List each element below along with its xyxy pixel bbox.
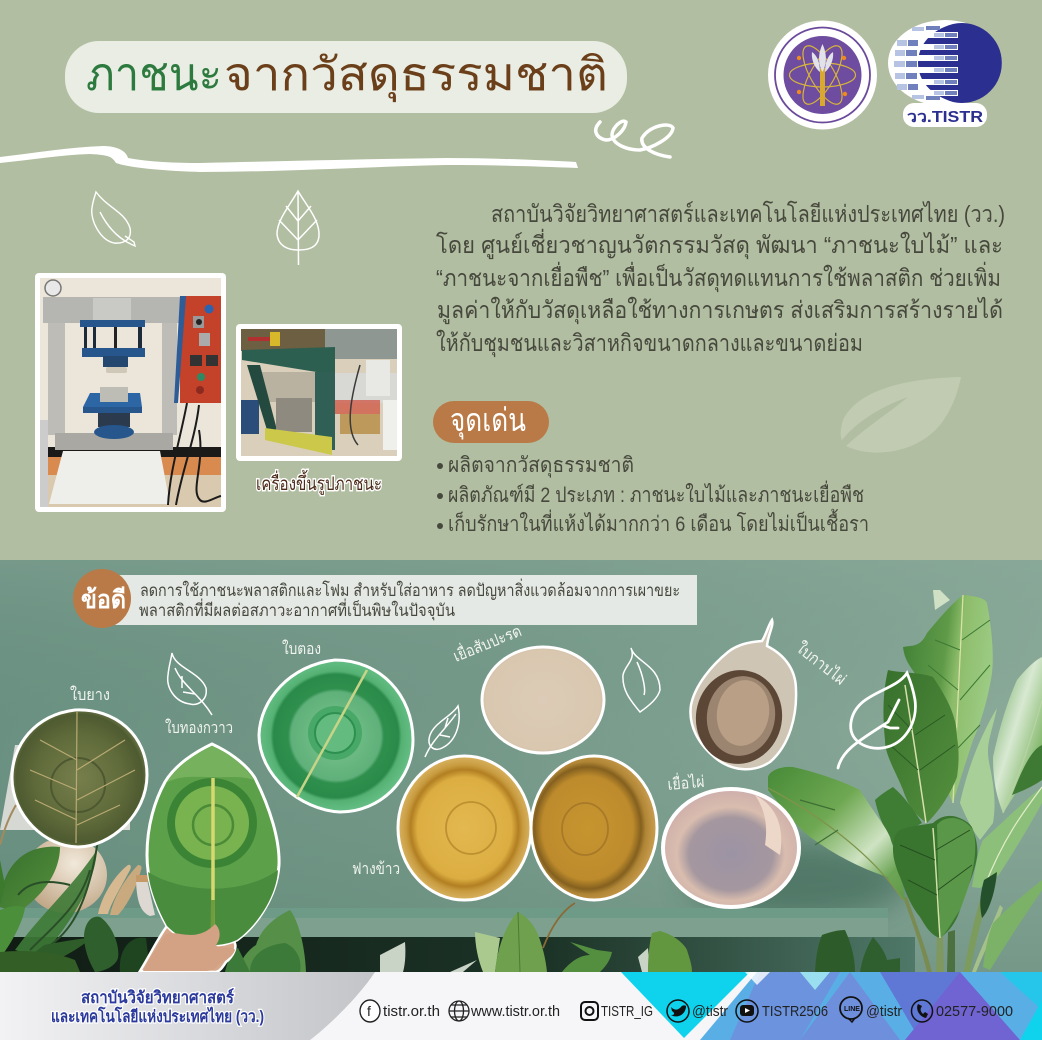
card behind plate — [0, 745, 130, 830]
icon: TISTR logo — [888, 20, 1002, 127]
plate: pineapple pulp — [482, 647, 604, 753]
text block: description: ให้กับชุมชนและวิสาหกิจขนาดกลางและขนาดย่อม — [436, 330, 863, 357]
panel: advantages banner: ลดการใช้ภาชนะพลาสติกและโฟม สำหรับใส่อาหาร ลดปัญหาสิ่งแวดล้อมจากการเผาขยะ — [140, 578, 680, 600]
label: rubber leaf: ใบยาง — [70, 685, 110, 704]
contact: facebook: tistr.or.th — [383, 1003, 440, 1020]
plate: bamboo pulp — [663, 789, 799, 907]
panel: advantages banner: พลาสติกที่มีผลต่อสภาวะอากาศที่เป็นพิษในปัจจุบัน — [139, 598, 455, 621]
squiggle decoration — [596, 121, 673, 157]
leaf: small back — [960, 708, 997, 840]
panel: advantages banner: ข้อดี — [81, 586, 126, 614]
icon: globe — [449, 1001, 469, 1021]
leaf: horizontal — [768, 767, 905, 900]
leaf: tall top — [903, 595, 993, 803]
footer: institute name: และเทคโนโลยีแห่งประเทศไทย (วว.) — [51, 1006, 264, 1026]
plants: lower middle foliage — [225, 903, 900, 972]
label: rice straw: ฟางข้าว — [352, 860, 400, 878]
plant: banana leaves at right — [768, 590, 1042, 972]
leaf: right lower — [972, 787, 1042, 888]
brush stroke under title — [0, 146, 578, 172]
leaf: centre front — [893, 816, 977, 938]
icon: translucent leaf — [841, 377, 961, 453]
icon: outline leaf wall middle — [425, 706, 459, 757]
footer: institute name — [51, 988, 264, 1026]
contact: line: @tistr — [866, 1003, 902, 1020]
plate: rubber leaf — [12, 710, 147, 847]
list: highlights — [437, 454, 869, 536]
icon: outline leaf wall left — [168, 653, 212, 715]
plate: butea leaf with hand — [140, 744, 279, 972]
contact: youtube: TISTR2506 — [762, 1003, 828, 1020]
vase and lids — [0, 805, 155, 916]
icon: line: LINE — [844, 1006, 860, 1013]
icon: large outline leaf — [838, 673, 915, 768]
label: pineapple pulp: เยื่อสับปะรด — [450, 619, 524, 666]
panel: top sage background — [0, 0, 1042, 560]
icon: phone — [912, 1000, 932, 1022]
label: bamboo pulp: เยื่อไผ่ — [667, 770, 705, 794]
list: highlights: ผลิตจากวัสดุธรรมชาติ — [448, 454, 634, 478]
footer: institute name: สถาบันวิจัยวิทยาศาสตร์ — [81, 988, 234, 1007]
icon: TISTR logo: วว.TISTR — [907, 109, 983, 126]
icon: facebook — [360, 1000, 380, 1022]
contact: twitter: @tistr — [692, 1003, 728, 1020]
photo: forming machine small — [236, 324, 402, 461]
text block: description — [436, 201, 1005, 357]
plate: rice straw pair — [398, 756, 657, 900]
label: butea leaf: ใบทองกวาว — [165, 718, 233, 737]
plate: banana leaf — [259, 660, 413, 812]
shelf — [0, 908, 915, 972]
title — [65, 41, 627, 113]
label: bamboo sheath: ใบกาบไผ่ — [793, 638, 850, 689]
list: highlights: เก็บรักษาในที่แห้งได้มากกว่า 6 เดือน โดยไม่เป็นเชื้อรา — [448, 509, 869, 536]
icon: youtube — [736, 1000, 758, 1022]
leaf: bottom right — [983, 880, 1042, 970]
icon: instagram — [581, 1002, 598, 1020]
label: banana leaf: ใบตอง — [282, 639, 321, 658]
icon: outline leaf wall right — [623, 648, 660, 712]
icon: ministry logo — [768, 20, 877, 130]
icon: facebook: f — [367, 1003, 371, 1019]
caption: machine: เครื่องขึ้นรูปภาชนะ — [256, 470, 382, 495]
heading: highlights — [433, 401, 549, 443]
panel: footer — [0, 972, 1042, 1040]
footer: contact row — [360, 997, 1013, 1022]
plants: lower left foliage — [0, 840, 150, 972]
leaf: small left — [875, 787, 922, 845]
title: จากวัสดุธรรมชาติ — [224, 48, 608, 103]
contact: website: www.tistr.or.th — [470, 1003, 560, 1020]
title: ภาชนะ — [86, 48, 222, 100]
panel: advantages banner — [73, 569, 697, 628]
contact: instagram: TISTR_IG — [601, 1003, 653, 1020]
contact: phone: 02577-9000 — [936, 1003, 1013, 1020]
plate: bamboo sheath — [688, 620, 796, 771]
icon: outline leaf with stem — [277, 191, 319, 265]
icon: outline leaf left — [92, 192, 135, 246]
leaf: dark centre — [883, 670, 959, 823]
icon: twitter — [667, 1000, 689, 1022]
panel: lower green wall scene — [0, 560, 1042, 972]
list: highlights: ผลิตภัณฑ์มี 2 ประเภท : ภาชนะใบไม้และภาชนะเยื่อพืช — [448, 480, 864, 507]
icon: line — [840, 997, 862, 1022]
leaf: right pale — [993, 657, 1042, 813]
heading: highlights: จุดเด่น — [450, 402, 526, 440]
text block: description: โดย ศูนย์เชี่ยวชาญนวัตกรรมวัสดุ พัฒนา “ภาชนะใบไม้” และ — [436, 228, 1003, 260]
photo: forming machine large — [35, 273, 226, 512]
